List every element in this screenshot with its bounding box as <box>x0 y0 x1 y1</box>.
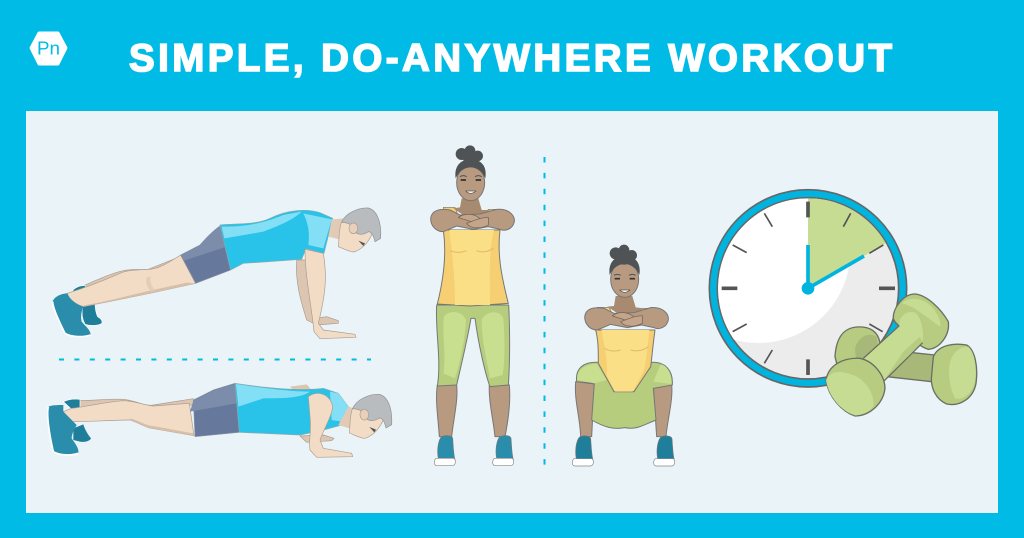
icon: clock <box>708 188 908 388</box>
figure: woman standing squat start <box>431 145 514 466</box>
divider: horizontal dashed line between push-ups <box>59 358 371 360</box>
logo: Pn hexagon <box>31 33 66 64</box>
title: SIMPLE, DO-ANYWHERE WORKOUT <box>129 37 892 80</box>
figure: man in push-up bottom position <box>48 383 392 457</box>
icon: dumbbells <box>826 294 977 416</box>
divider: vertical dashed line between squats <box>544 157 546 466</box>
logo: Pn hexagon: Pn <box>37 38 60 58</box>
panel: workout background <box>26 111 998 513</box>
figure: man in push-up top position <box>53 208 381 339</box>
figure: woman in squat <box>572 245 675 466</box>
